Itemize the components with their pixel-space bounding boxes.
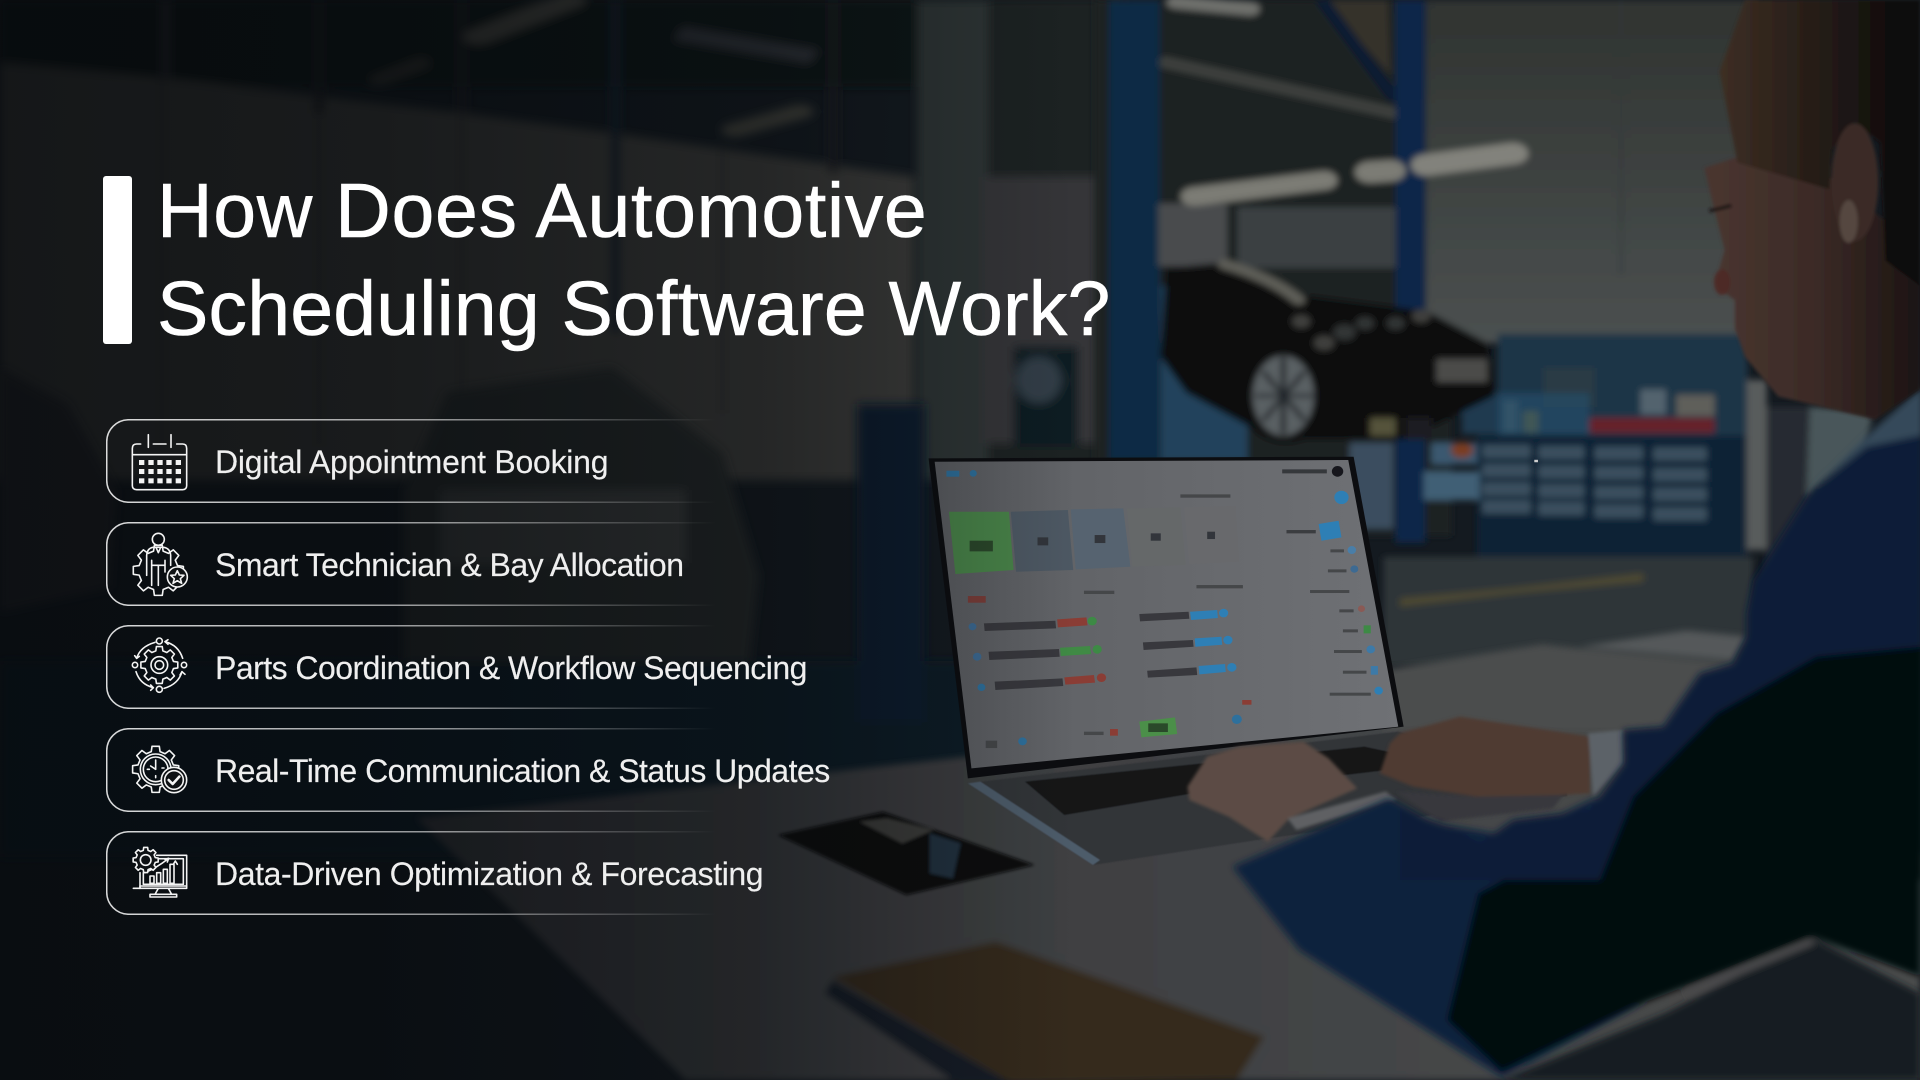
label: Real-Time Communication & Status Updates: [215, 753, 830, 789]
desk surface: [416, 631, 1920, 1080]
list item: Data-Driven Optimization & Forecasting: [106, 831, 763, 915]
list item: Digital Appointment Booking: [106, 419, 698, 503]
hands on keyboard: [1188, 717, 1624, 842]
title accent bar: [103, 176, 132, 344]
label: Smart Technician & Bay Allocation: [215, 547, 684, 583]
phone on desk: [778, 812, 1035, 895]
woman: suit jacket: [1233, 387, 1920, 1080]
icon: clock in gear with check badge: [132, 746, 188, 794]
label: Digital Appointment Booking: [215, 444, 608, 480]
icon: calendar: [132, 434, 188, 490]
laptop with scheduling dashboard: [929, 457, 1567, 865]
list item: Parts Coordination & Workflow Sequencing: [106, 625, 807, 709]
title: How Does Automotive: [157, 168, 927, 254]
label: Parts Coordination & Workflow Sequencing: [215, 650, 807, 686]
icon: monitor with chart and gear: [132, 846, 188, 898]
title: [157, 168, 1110, 352]
list item: Real-Time Communication & Status Updates: [106, 728, 830, 812]
title: Scheduling Software Work?: [157, 266, 1110, 352]
woman: head and hair: [1704, 0, 1920, 420]
small white speck on cabinet: [1534, 460, 1538, 462]
workshop: back wall, car, pegboard, cabinets: [1095, 0, 1873, 667]
icon: gear with workflow cycle: [132, 637, 188, 694]
car silhouettes behind the text: [0, 367, 980, 857]
floor and far end of table: [1383, 380, 1873, 667]
icon: technician with gear and star: [132, 532, 188, 596]
upper left: windows and wall panels: [0, 0, 1124, 480]
list item: Smart Technician & Bay Allocation: [106, 522, 698, 606]
label: Data-Driven Optimization & Forecasting: [215, 856, 763, 892]
